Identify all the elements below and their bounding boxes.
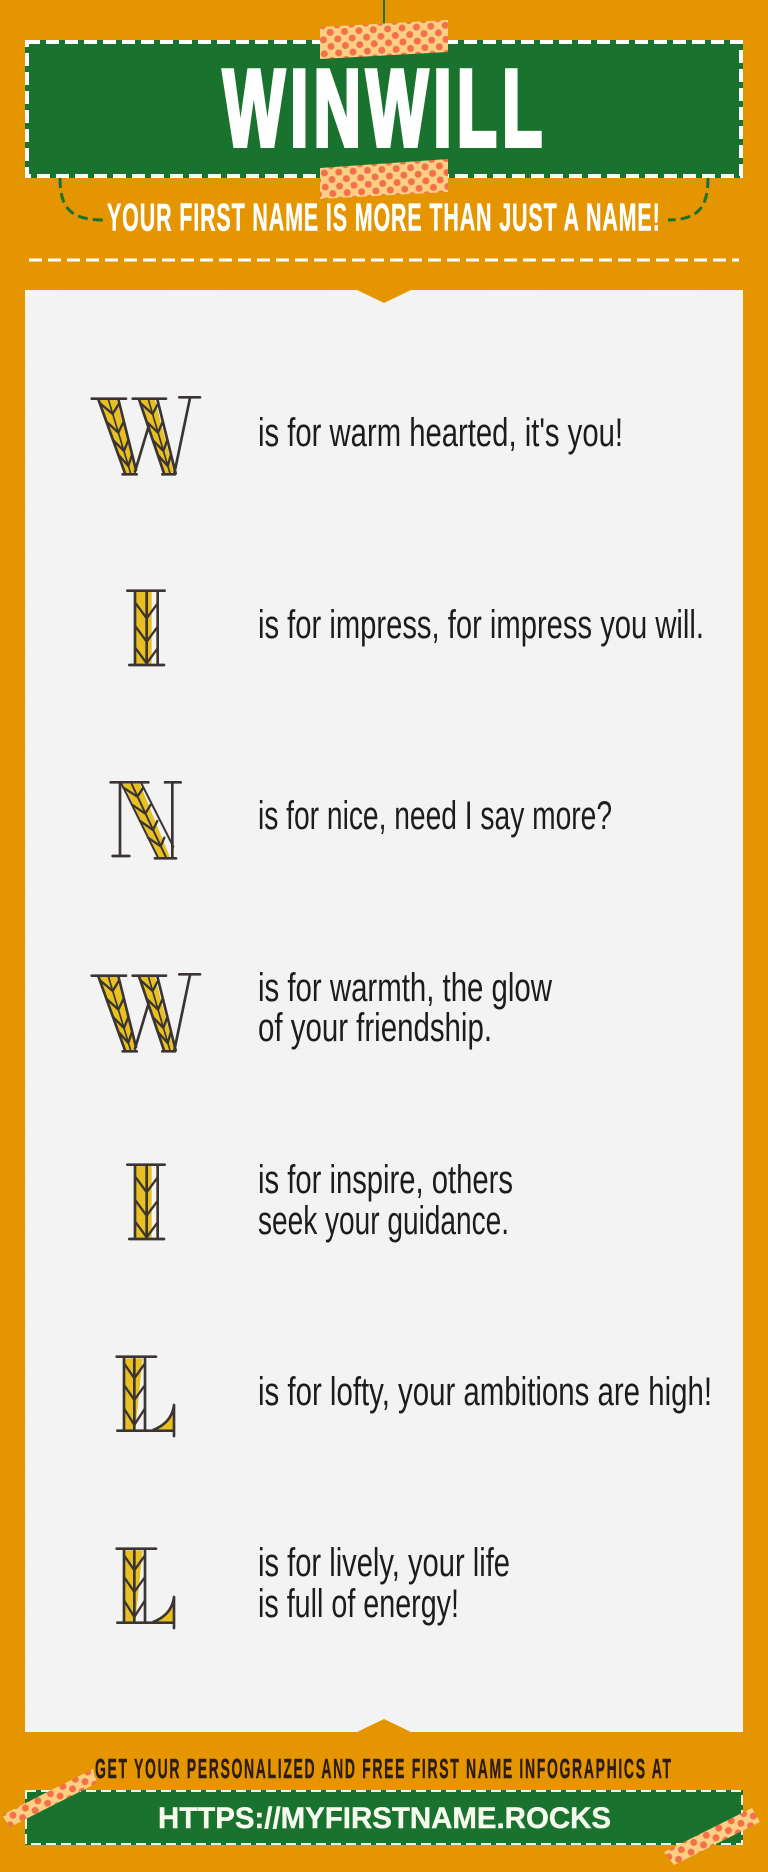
icon: letter I bbox=[127, 1165, 165, 1239]
text: I lines: seek your guidance. bbox=[258, 1199, 509, 1243]
hanging string bbox=[383, 0, 385, 25]
top tape bbox=[320, 20, 448, 59]
text: L lines bbox=[258, 1541, 510, 1626]
left footer tape bbox=[2, 1769, 97, 1827]
icon: letter N bbox=[111, 782, 181, 858]
left dashed bracket bbox=[60, 178, 103, 220]
text: W lines: of your friendship. bbox=[258, 1006, 492, 1050]
text: W lines: is for warmth, the glow bbox=[258, 966, 552, 1010]
right dashed bracket bbox=[668, 178, 708, 220]
title: WINWILL bbox=[223, 48, 542, 170]
bottom tape bbox=[320, 159, 448, 199]
text: W line: is for warm hearted, it's you! bbox=[258, 411, 623, 455]
icon: letter W bbox=[92, 397, 200, 474]
text: W lines bbox=[258, 966, 552, 1050]
panel: letters bbox=[25, 290, 743, 1732]
right footer tape bbox=[664, 1808, 760, 1865]
icon: letter W bbox=[92, 974, 200, 1051]
subtitle: YOUR FIRST NAME IS MORE THAN JUST A NAME! bbox=[107, 196, 660, 239]
icon: letter L bbox=[117, 1549, 174, 1628]
footer call to action: GET YOUR PERSONALIZED AND FREE FIRST NAME INFOGRAPHICS AT bbox=[95, 1753, 671, 1784]
footer url: HTTPS://MYFIRSTNAME.ROCKS bbox=[158, 1802, 611, 1835]
icon: letter L bbox=[117, 1357, 174, 1436]
footer banner bbox=[25, 1790, 743, 1845]
text: L lines: is full of energy! bbox=[258, 1582, 459, 1626]
text: N line: is for nice, need I say more? bbox=[258, 794, 612, 838]
header banner bbox=[25, 40, 743, 178]
dashed divider bbox=[29, 258, 739, 262]
text: I lines bbox=[258, 1158, 513, 1243]
icon: letter I bbox=[127, 591, 165, 665]
text: I lines: is for inspire, others bbox=[258, 1158, 513, 1202]
text: L lines: is for lively, your life bbox=[258, 1541, 510, 1585]
